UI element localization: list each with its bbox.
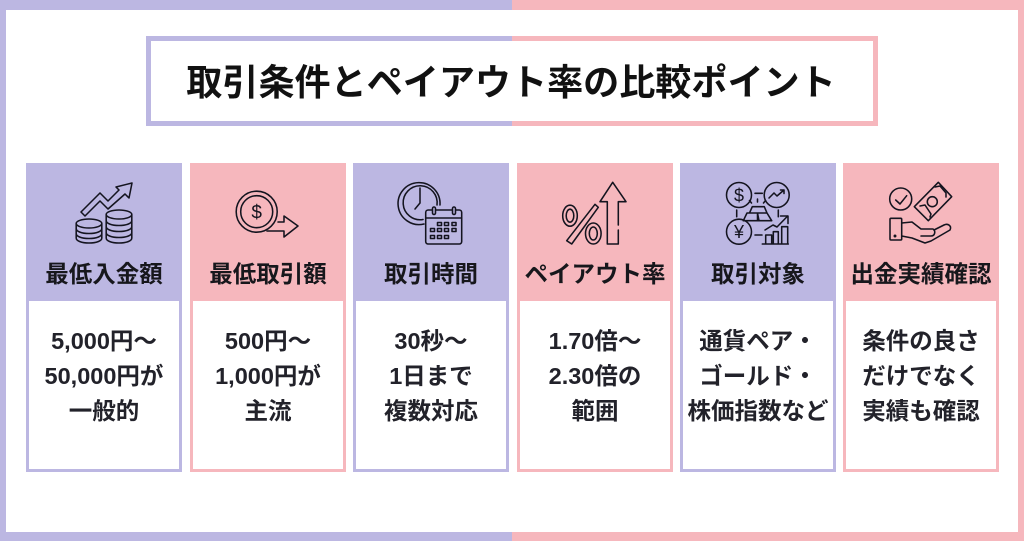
text: 実績も確認 <box>862 398 980 424</box>
text: 主流 <box>244 398 292 424</box>
text: 50,000円が <box>45 363 163 389</box>
text: 複数対応 <box>384 398 478 424</box>
panel: 最低取引額 <box>190 163 346 472</box>
label: 出金実績確認 <box>850 261 992 287</box>
icon: percent and up arrow <box>562 182 627 245</box>
label: 最低入金額 <box>45 261 163 287</box>
text: 30秒〜 <box>394 328 468 354</box>
panel: 出金実績確認 <box>843 163 999 472</box>
text <box>45 328 163 424</box>
text: 1日まで <box>389 363 473 389</box>
text: 2.30倍の <box>549 363 641 389</box>
label: ペイアウト率 <box>524 261 666 287</box>
text <box>384 328 478 424</box>
panel: ペイアウト率 <box>517 163 673 472</box>
text: 1.70倍〜 <box>549 328 641 354</box>
label: 取引対象 <box>711 261 805 287</box>
label: 最低取引額 <box>209 261 327 287</box>
icon: coins and rising arrow <box>75 182 133 244</box>
panel: 取引対象 <box>680 163 836 472</box>
icon: hand with banknote and check <box>888 182 952 244</box>
icon: dollar coin with arrow <box>235 190 299 238</box>
text: 1,000円が <box>215 363 321 389</box>
text: 一般的 <box>69 398 139 424</box>
panel: 最低入金額 <box>26 163 182 472</box>
panel: 取引時間 <box>353 163 509 472</box>
text: 5,000円〜 <box>51 328 157 354</box>
icon: dollar coin with arrow: $ <box>251 202 262 224</box>
text: 通貨ペア・ <box>699 328 817 354</box>
text <box>215 328 321 424</box>
text: 株価指数など <box>688 398 828 424</box>
icon: currencies, gold bars and chart <box>726 182 790 245</box>
text: 500円〜 <box>225 328 311 354</box>
label: 取引時間 <box>384 261 478 287</box>
icon: currencies, gold bars and chart: ¥ <box>733 222 745 242</box>
text: 範囲 <box>572 398 618 424</box>
icon: clock and calendar <box>397 182 462 245</box>
text <box>862 328 980 424</box>
text <box>688 328 828 424</box>
text: 条件の良さ <box>862 328 980 354</box>
title: 取引条件とペイアウト率の比較ポイント <box>186 62 836 103</box>
title box <box>146 36 878 126</box>
text: ゴールド・ <box>699 363 817 389</box>
text <box>549 328 641 424</box>
text: だけでなく <box>862 363 980 389</box>
icon: currencies, gold bars and chart: $ <box>734 186 744 206</box>
